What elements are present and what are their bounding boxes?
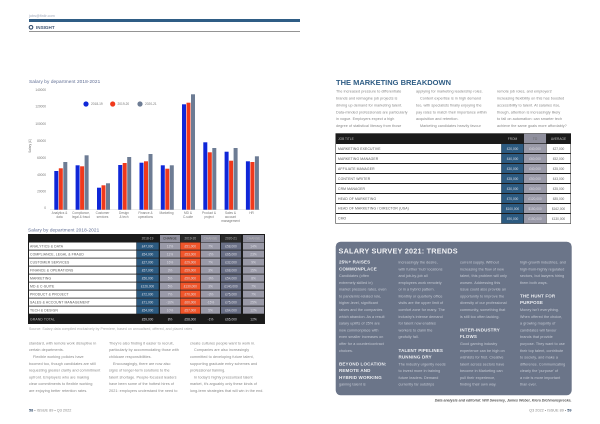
table rows: £53,000 xyxy=(185,252,196,256)
marketing body text: Content expertise is in high demand xyxy=(420,97,481,101)
table rows: £57,000 xyxy=(142,268,153,272)
marketing body text: pay rates to match their importance within xyxy=(416,110,487,114)
trends columns text: HYBRID WORKING xyxy=(339,375,382,380)
bar chart: salary by department: 120000 xyxy=(35,104,46,108)
chart legend: 2018-19 xyxy=(91,102,103,106)
section tag: insight: INSIGHT xyxy=(36,25,55,30)
trends columns text: finding their own way. xyxy=(460,383,497,387)
left page body text: boomed too, though candidates are still xyxy=(29,362,96,366)
trends columns text: now commonplace with xyxy=(339,328,379,332)
trends columns text: market pressure rates, even xyxy=(339,288,387,292)
table rows: £58,000 xyxy=(185,318,196,322)
trends columns text: to invest more in training xyxy=(398,369,440,373)
table rows: £58,000 xyxy=(225,244,237,248)
data credit: Data analysis and editorial: Will Sweeney, James Weber, Kiera Dichmansprecka. xyxy=(435,398,572,402)
table: marketing job titles: £50,000 xyxy=(529,177,541,181)
trends columns text: sectors, but lawyers hiring xyxy=(520,274,564,278)
table source note: Source: Salary data compiled exclusively by Premiere, based on annualised, offered, and placed rates xyxy=(29,327,193,331)
table rows: COMPLIANCE, LEGAL & FRAUD xyxy=(30,252,84,256)
table: marketing job titles: £150,000 xyxy=(528,217,542,221)
trends columns text: gaining talent is xyxy=(339,383,366,387)
bar chart: salary by department: Finance & xyxy=(138,211,154,215)
table rows: £57,000 xyxy=(185,308,196,312)
table rows: 3% xyxy=(208,284,213,288)
table rows: £51,000 xyxy=(185,244,196,248)
table rows: TECH & DESIGN xyxy=(30,308,58,312)
left page body text: standard, with remote work disruptive in xyxy=(29,341,96,345)
table rows: FINANCE & OPERATIONS xyxy=(30,268,74,272)
trends columns text: pull their experience, xyxy=(460,376,495,380)
left page body text: market, it's arguably only these kinds of xyxy=(190,382,258,386)
left page body text: Flexible working policies have xyxy=(33,355,84,359)
trends columns text: Good gaming industry xyxy=(460,342,497,346)
table: salary by department: CHANGE xyxy=(163,237,177,241)
right page footer: Q3 2022 • ISSUE 89 • 59 xyxy=(529,408,572,412)
marketing body text xyxy=(336,90,567,128)
trends columns text: increasingly the desire, xyxy=(398,260,438,264)
marketing body text: driving up demand for marketing talent. xyxy=(336,104,402,108)
trends columns text: workers to claim the xyxy=(398,328,432,332)
trends columns text: to pandemic-related role, xyxy=(339,294,381,298)
table: marketing job titles: FROM xyxy=(508,137,518,141)
left page body text: particularly by accommodating those with xyxy=(109,348,179,352)
table rows: 7% xyxy=(208,244,213,248)
table rows: -9% xyxy=(208,276,213,280)
left page body text: long-term strategies that will win in the end. xyxy=(190,389,263,393)
marketing body text: in vogue. Employers expect a high xyxy=(336,117,394,121)
table rows: 3% xyxy=(208,268,213,272)
table rows: £27,000 xyxy=(142,260,153,264)
trends columns text: increasing the flow of new xyxy=(460,267,504,271)
bar chart: salary by department: Design xyxy=(119,211,129,215)
trends columns text: candidates will favour xyxy=(520,328,557,332)
trends columns text: a growing majority of xyxy=(520,322,556,326)
table: marketing job titles: MARKETING EXECUTIVE xyxy=(338,147,381,151)
table rows: CUSTOMER SERVICES xyxy=(30,260,70,264)
trends columns text: become in Marketing can xyxy=(460,369,503,373)
chart legend xyxy=(83,101,157,107)
table: marketing job titles: £52,000 xyxy=(553,157,564,161)
table rows: 12% xyxy=(167,244,173,248)
table rows: £54,000 xyxy=(142,308,153,312)
table rows: -2% xyxy=(208,252,213,256)
trends columns text: COMMONPLACE xyxy=(339,266,377,271)
table: salary by department: CHANGE xyxy=(247,237,260,241)
bar chart: salary by department: Sales & xyxy=(225,211,237,215)
left page body text: Companies are also increasingly xyxy=(194,348,249,352)
trends columns text: than ever. xyxy=(520,383,537,387)
panel: salary survey trends xyxy=(336,242,572,395)
trends columns text: currently far outstrips xyxy=(398,383,434,387)
table rows: £140,000 xyxy=(224,284,238,288)
trends columns text: raises and the companies xyxy=(339,308,383,312)
table rows: -1% xyxy=(208,318,213,322)
trends columns text: REMOTE AND xyxy=(339,368,371,373)
trends columns text: THE HUNT FOR xyxy=(520,293,556,298)
trends columns text: which abandon. As a result xyxy=(339,315,385,319)
table: marketing job titles: £30,000 xyxy=(507,187,518,191)
table rows: £50,000 xyxy=(185,276,196,280)
bar chart: salary by department: Compliance, xyxy=(72,211,90,215)
chart legend: 2019-20 xyxy=(118,102,129,106)
trends columns text: worsen. Addressing this xyxy=(460,281,500,285)
table: marketing job titles: £27,000 xyxy=(553,147,564,151)
left page body text: have been some of the hottest hires of xyxy=(109,382,175,386)
table: salary by department: 2018-19 xyxy=(142,237,154,241)
table rows: £59,000 xyxy=(185,268,196,272)
bar chart: salary by department: MD & xyxy=(184,211,193,215)
table rows: £75,000 xyxy=(225,300,237,304)
table: marketing job titles: £30,000 xyxy=(507,167,518,171)
table: marketing job titles: AVERAGE xyxy=(551,137,566,141)
left page body text: Encouragingly, there are now also xyxy=(113,362,170,366)
trends columns text: 25%+ RAISES xyxy=(339,260,370,264)
table rows: 12% xyxy=(250,308,257,312)
table rows: £64,000 xyxy=(225,308,237,312)
left page body text: In today's highly pressurised talent xyxy=(194,375,253,379)
trends columns text: When offered the choice, xyxy=(520,315,562,319)
chart legend: 2020-21 xyxy=(145,102,157,106)
marketing body text: brands and reimagine job projects is xyxy=(336,97,397,101)
table rows: £60,000 xyxy=(185,300,196,304)
trends columns text: RUNNING DRY xyxy=(398,355,432,360)
bar chart: salary by department: account xyxy=(225,215,236,219)
trends columns text: with further 'hub' locations xyxy=(398,267,443,271)
table: marketing job titles: £20,000 xyxy=(507,147,518,151)
trends columns text: to society, and make a xyxy=(520,356,559,360)
trends columns text: purpose. They want to use xyxy=(520,342,565,346)
table rows: £126,000 xyxy=(141,284,154,288)
bar chart: salary by department: Analytics & xyxy=(52,211,68,215)
table rows: GRAND TOTAL xyxy=(30,318,55,322)
table rows: 8% xyxy=(168,318,172,322)
bar chart: salary by department: 0 xyxy=(44,206,46,210)
left page body text: create cultures people want to work in. xyxy=(190,341,255,345)
bar chart: salary by department: management xyxy=(221,219,240,223)
table rows: £59,000 xyxy=(142,318,153,322)
table rows: 25% xyxy=(250,300,257,304)
trends columns text: INTER-INDUSTRY xyxy=(460,327,500,332)
table: marketing job titles: HEAD OF MARKETING xyxy=(338,197,376,201)
left page body text: clear commitments to flexible working xyxy=(29,382,92,386)
table: marketing job titles: £120,000 xyxy=(528,197,542,201)
table rows: 7% xyxy=(251,284,256,288)
table: salary by department: 2020-21 xyxy=(225,237,237,241)
table: marketing job titles: £40,000 xyxy=(507,157,518,161)
table rows: 15% xyxy=(250,268,257,272)
marketing body text: acquisition and retention. xyxy=(416,117,459,121)
left page body text: requesting greater clarity and commitment xyxy=(29,369,100,373)
table: marketing job titles: $150,000 xyxy=(528,207,542,211)
table: marketing job titles: £60,000 xyxy=(529,157,541,161)
header: contact email: jobs@finlir.com xyxy=(28,14,55,18)
table: marketing job titles: £43,000 xyxy=(553,177,564,181)
left page body text: are enjoying better retention rates. xyxy=(29,389,87,393)
trends columns text: a role is more important xyxy=(520,376,560,380)
table: marketing job titles: £40,000 xyxy=(529,147,541,151)
table rows: £65,000 xyxy=(225,318,237,322)
marketing body text: increasing flexibility on this has boosted xyxy=(497,97,564,101)
table rows: £56,000 xyxy=(142,276,153,280)
table: marketing job titles: £35,000 xyxy=(553,187,564,191)
trends columns text: geofully fall. xyxy=(398,335,419,339)
table: salary by department: 2019-20 xyxy=(184,237,196,241)
marketing body text: to fall on automation: can smarter tech xyxy=(497,117,562,121)
table rows: £68,000 xyxy=(225,268,237,272)
trends columns text: issue could also provide an xyxy=(460,288,506,292)
marketing body text: though, attention is increasingly likely xyxy=(497,110,560,114)
trends columns text: BEYOND LOCATION: xyxy=(339,361,387,366)
trends columns text: talent, this problem will only xyxy=(460,274,507,278)
table rows: £72,000 xyxy=(142,292,153,296)
trends columns text: for talent now enables xyxy=(398,322,436,326)
table: marketing job titles: £90,000 xyxy=(507,217,518,221)
table: marketing job titles: JOB TITLE xyxy=(338,137,354,141)
table rows: 8% xyxy=(251,276,256,280)
bar chart: salary by department: 40000 xyxy=(37,173,46,177)
left page body text xyxy=(29,341,263,393)
table rows: £65,000 xyxy=(225,252,237,256)
table rows: £70,000 xyxy=(185,292,196,296)
table rows: 12% xyxy=(250,318,257,322)
table: marketing job titles: £85,000 xyxy=(553,197,564,201)
table rows: 7% xyxy=(168,292,172,296)
trends columns text: high-from-highly regulated xyxy=(520,267,564,271)
trends columns text: offer for a counter/contract xyxy=(339,342,384,346)
bar chart: salary by department: 80000 xyxy=(37,139,46,143)
table: marketing job titles: AFFILIATE MANAGER xyxy=(338,167,375,171)
trends columns text: choices. xyxy=(339,349,353,353)
table rows: 5% xyxy=(168,284,172,288)
marketing body text: accessibility to talent. At salaries rise, xyxy=(497,104,560,108)
table: salary by department xyxy=(28,234,265,324)
table rows: £71,000 xyxy=(142,300,153,304)
trends columns text: current supply. Without xyxy=(460,260,499,264)
table rows: 7% xyxy=(208,260,213,264)
table rows: -3% xyxy=(208,292,213,296)
bar chart: salary by department: 20000 xyxy=(37,190,46,194)
trends columns text: higher-level, significant xyxy=(339,301,378,305)
left page body text: talent shortage. People-focused leaders xyxy=(109,375,177,379)
trends columns text: their top talent, contribute xyxy=(520,349,563,353)
table rows: 23% xyxy=(250,252,257,256)
table rows: SALES & ACCOUNT MANAGEMENT xyxy=(30,300,90,304)
marketing body text: Marketing candidates heavily favour xyxy=(420,124,482,128)
left page body text: supporting graduate entry schemes and xyxy=(190,362,257,366)
trends columns text: comfort zone for many. The xyxy=(398,308,445,312)
section tag: insight xyxy=(29,25,300,32)
bar chart: salary by department: HR xyxy=(249,211,254,215)
bar chart: salary by department: 100000 xyxy=(35,122,46,126)
table rows: -15% xyxy=(207,300,214,304)
trends columns text: brands that provide xyxy=(520,335,553,339)
table: marketing job titles: MARKETING MANAGER xyxy=(338,157,379,161)
table: marketing job titles: £70,000 xyxy=(507,197,518,201)
table: marketing job titles xyxy=(336,133,571,224)
table rows: £130,000 xyxy=(184,284,197,288)
table rows: £29,000 xyxy=(185,260,196,264)
table: marketing job titles: HEAD OF MARKETING / DIRECTOR (USA) xyxy=(338,207,409,211)
left page footer: 58 • ISSUE 89 • Q3 2022 xyxy=(29,408,71,412)
bar chart: salary by department: Salary (£) xyxy=(28,139,32,153)
trends columns text: Monthly or quarterly office xyxy=(398,294,442,298)
trends columns text: high-growth industries, and xyxy=(520,260,566,264)
trends columns text: talent across sectors have xyxy=(460,362,504,366)
bar chart: salary by department: data xyxy=(56,215,63,219)
marketing body text: too, with specialists finally enjoying the xyxy=(416,104,482,108)
bar chart: salary by department: Customer xyxy=(96,211,110,215)
trends columns text: TALENT PIPELINES xyxy=(398,348,443,353)
table: marketing job titles: £60,000 xyxy=(529,187,541,191)
table: marketing job titles: £40,000 xyxy=(529,167,541,171)
trends columns text: or in a hybrid pattern. xyxy=(398,288,435,292)
marketing body text: remote job roles, and employers' xyxy=(497,90,553,94)
table: marketing job titles: $100,000 xyxy=(506,207,519,211)
marketing body text: The increased pressure to differentiate xyxy=(336,90,401,94)
trends columns text: Money isn't everything. xyxy=(520,308,559,312)
trends columns text: them both ways. xyxy=(520,281,548,285)
table rows: PRODUCT & PROJECT xyxy=(30,292,69,296)
bar chart: salary by department: 140000 xyxy=(35,88,46,92)
trends columns text: employees work remotely xyxy=(398,281,442,285)
bar chart: salary by department: Product & xyxy=(202,211,217,215)
left page body text: They're also finding it easier to recruit, xyxy=(109,341,174,345)
table rows: 10% xyxy=(167,308,173,312)
trends columns text: PURPOSE xyxy=(520,300,543,305)
table rows: £32,000 xyxy=(225,260,237,264)
heading: the marketing breakdown: THE MARKETING BREAKDOWN xyxy=(336,78,451,87)
table rows: ANALYTICS & DATA xyxy=(30,244,64,248)
chart title: Salary by department 2018-2021 xyxy=(29,79,101,84)
bar chart: salary by department: legal & fraud xyxy=(72,215,90,219)
left page body text: professional training. xyxy=(190,369,225,373)
panel heading: SALARY SURVEY 2021: TRENDS xyxy=(338,246,458,255)
marketing body text: applying for marketing leadership roles. xyxy=(416,90,483,94)
trends columns text: even smaller increases on xyxy=(339,335,383,339)
left page body text: childcare responsibilities. xyxy=(109,355,152,359)
table rows xyxy=(29,242,265,322)
bar chart: salary by department: services xyxy=(97,215,109,219)
bar chart: salary by department: operations xyxy=(138,215,153,219)
left page body text: signs of longer-term solutions to the xyxy=(109,369,170,373)
trends columns text: opportunity to improve the xyxy=(460,294,504,298)
table rows: £54,000 xyxy=(225,276,237,280)
table: marketing job titles: £35,000 xyxy=(553,167,564,171)
bar chart: salary by department: project xyxy=(204,215,214,219)
table rows: -16% xyxy=(166,300,174,304)
table rows: 14% xyxy=(250,244,257,248)
trends columns text: FLOWS xyxy=(460,334,477,339)
table: marketing job titles: CMO xyxy=(338,217,347,221)
marketing body text: degree of statistical literacy from those xyxy=(336,124,401,128)
table: marketing job titles: £35,000 xyxy=(507,177,518,181)
trends columns text: wishlists for first. Creative xyxy=(460,356,504,360)
trends columns text: The industry urgently needs xyxy=(398,362,446,366)
trends columns text xyxy=(339,260,566,387)
marketing body text: achieve the same goals more affordably? xyxy=(497,124,567,128)
trends columns text: future leaders. Demand xyxy=(398,376,438,380)
table title: Salary by department 2018-2021 xyxy=(28,228,100,232)
table: marketing job titles: CRM MANAGER xyxy=(338,187,366,191)
table: marketing job titles: £130,000 xyxy=(552,217,565,221)
left page body text: upfront. Employers who are making xyxy=(29,375,89,379)
marketing body text: Data-minded professionals are particularly xyxy=(336,110,408,114)
table rows: £47,000 xyxy=(142,244,153,248)
table rows: £54,000 xyxy=(142,252,153,256)
table rows: 3% xyxy=(168,268,172,272)
trends columns text: salary uplifts of 25% are xyxy=(339,322,380,326)
trends columns text: Candidates (often xyxy=(339,274,369,278)
table: salary by department: CHANGE xyxy=(204,237,217,241)
trends columns text: difference. Communicating xyxy=(520,362,565,366)
trends columns text: is still too often lacking. xyxy=(460,315,500,319)
left page body text: certain departments. xyxy=(29,348,64,352)
table: marketing job titles: CONTENT WRITER xyxy=(338,177,371,181)
table rows: 7% xyxy=(251,292,256,296)
table rows: MD & C-SUITE xyxy=(30,284,55,288)
bar chart: salary by department: 60000 xyxy=(37,156,46,160)
trends columns text: community, something that xyxy=(460,308,505,312)
bar chart: salary by department xyxy=(28,88,260,223)
trends columns text: experience can be high on xyxy=(460,349,505,353)
bar chart: salary by department: C-suite xyxy=(183,215,193,219)
trends columns text: clearly the 'purpose' of xyxy=(520,369,559,373)
left page body text: 2021: employers understand the need to xyxy=(109,389,178,393)
table rows: 16% xyxy=(167,260,173,264)
table rows: 5% xyxy=(168,276,172,280)
table rows: 5% xyxy=(208,308,213,312)
bar chart: salary by department: Marketing xyxy=(160,211,174,215)
header bar xyxy=(29,19,300,22)
trends columns text: visits are the upper limit of xyxy=(398,301,444,305)
table: marketing job titles: $162,000 xyxy=(552,207,565,211)
table rows: MARKETING xyxy=(30,276,51,280)
trends columns text: diversity of our professional xyxy=(460,301,507,305)
left page body text: committed to developing future talent, xyxy=(190,355,254,359)
trends columns text: industry's intense demand xyxy=(398,315,443,319)
trends columns text: extremely skilled in) xyxy=(339,281,373,285)
table rows: £75,000 xyxy=(225,292,237,296)
trends columns text: and job-by-job all xyxy=(398,274,428,278)
table: marketing job titles: TO xyxy=(533,137,538,141)
bar chart: salary by department: & tech xyxy=(119,215,129,219)
table rows: 11% xyxy=(167,252,173,256)
table rows: 9% xyxy=(251,260,256,264)
